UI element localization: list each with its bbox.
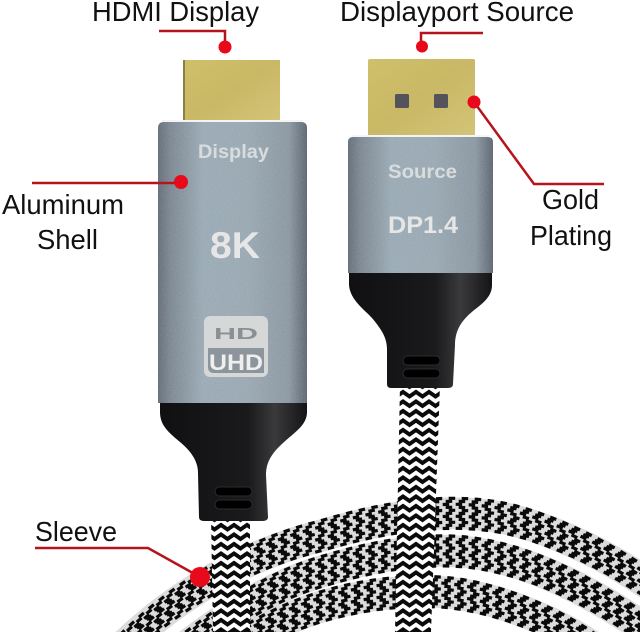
- DP aluminum shell: [348, 135, 493, 273]
- HD UHD badge: UHD: [209, 350, 263, 375]
- label: 8K: 8K: [210, 225, 260, 266]
- HD UHD badge: [204, 316, 268, 377]
- HDMI connector: [158, 60, 307, 521]
- callout: Gold Plating: Plating: [530, 220, 612, 251]
- callout: Gold Plating: Gold: [542, 184, 599, 215]
- DisplayPort connector: [348, 59, 493, 388]
- DP black boot: [349, 273, 492, 388]
- DP gold plug: [368, 59, 475, 137]
- callout: Aluminum Shell: [2, 175, 188, 255]
- HDMI gold plug: [183, 60, 280, 122]
- HDMI black boot: [160, 403, 307, 521]
- HDMI cable: [211, 515, 250, 632]
- callout: Sleeve: [35, 516, 210, 587]
- HD UHD badge: HD: [214, 326, 258, 343]
- callout: Sleeve: Sleeve: [35, 516, 117, 547]
- callout: Aluminum Shell: Shell: [37, 224, 98, 255]
- coiled braided cable: [0, 490, 640, 632]
- callout: Gold Plating: [468, 96, 612, 251]
- callout: HDMI Display: [92, 0, 259, 54]
- label: DP1.4: DP1.4: [388, 212, 459, 239]
- HDMI aluminum shell: [158, 120, 307, 403]
- callout: Aluminum Shell: Aluminum: [2, 189, 124, 220]
- DisplayPort cable: [395, 385, 440, 632]
- label: Source: Source: [388, 162, 457, 183]
- label: Display: Display: [198, 142, 269, 163]
- callout: Displayport Source: [340, 0, 574, 52]
